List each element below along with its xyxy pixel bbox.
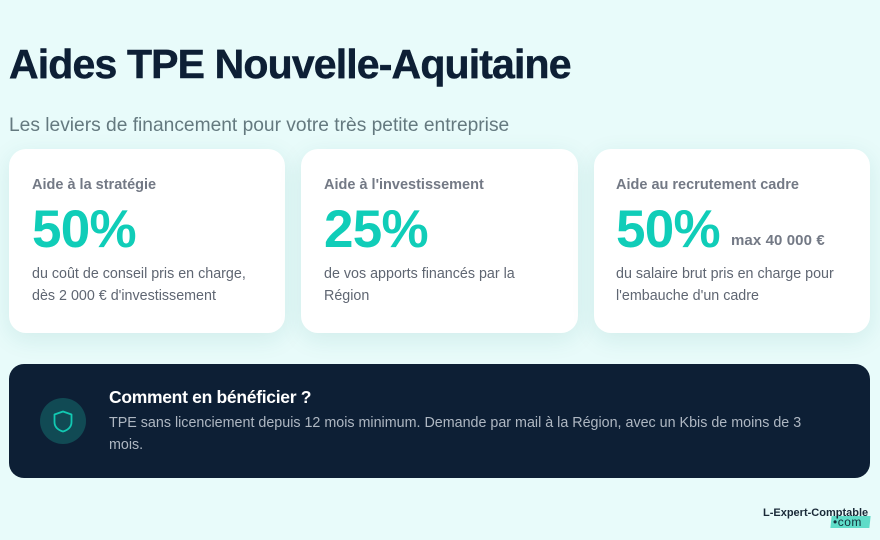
card description: du coût de conseil pris en charge, <box>32 266 246 282</box>
panel: comment en bénéficier <box>9 364 870 478</box>
card description: Région <box>324 288 369 304</box>
card description <box>616 266 834 304</box>
logo: L-Expert-Comptable.com <box>763 507 871 529</box>
callout heading: Comment en bénéficier ? <box>109 387 311 407</box>
card description <box>32 266 246 304</box>
panel: stratégie <box>9 149 285 333</box>
callout text: TPE sans licenciement depuis 12 mois minimum. Demande par mail à la Région, avec un Kbis de moins de 3 <box>109 415 801 431</box>
subtitle: Les leviers de financement pour votre très petite entreprise <box>9 115 509 136</box>
card label: Aide à l'investissement <box>324 177 484 193</box>
card label: Aide au recrutement cadre <box>616 177 799 193</box>
panel: investissement <box>301 149 578 333</box>
card description <box>324 266 515 304</box>
card description: du salaire brut pris en charge pour <box>616 266 834 282</box>
callout text <box>109 415 801 453</box>
logo suffix: •com <box>833 515 862 529</box>
big percentage: 50% <box>616 200 720 259</box>
card description: dès 2 000 € d'investissement <box>32 288 216 304</box>
callout text: mois. <box>109 437 143 453</box>
big percentage: 25% <box>324 200 428 259</box>
logo highlight <box>830 516 871 528</box>
panel: recrutement cadre <box>594 149 870 333</box>
card label: Aide à la stratégie <box>32 177 156 193</box>
big percentage: 50% <box>32 200 136 259</box>
card description: l'embauche d'un cadre <box>616 288 759 304</box>
card description: de vos apports financés par la <box>324 266 515 282</box>
icon: shield <box>40 398 86 444</box>
logo name: L-Expert-Comptable <box>763 507 868 519</box>
title: Aides TPE Nouvelle-Aquitaine <box>9 41 571 87</box>
salary cap note: max 40 000 € <box>731 232 825 249</box>
